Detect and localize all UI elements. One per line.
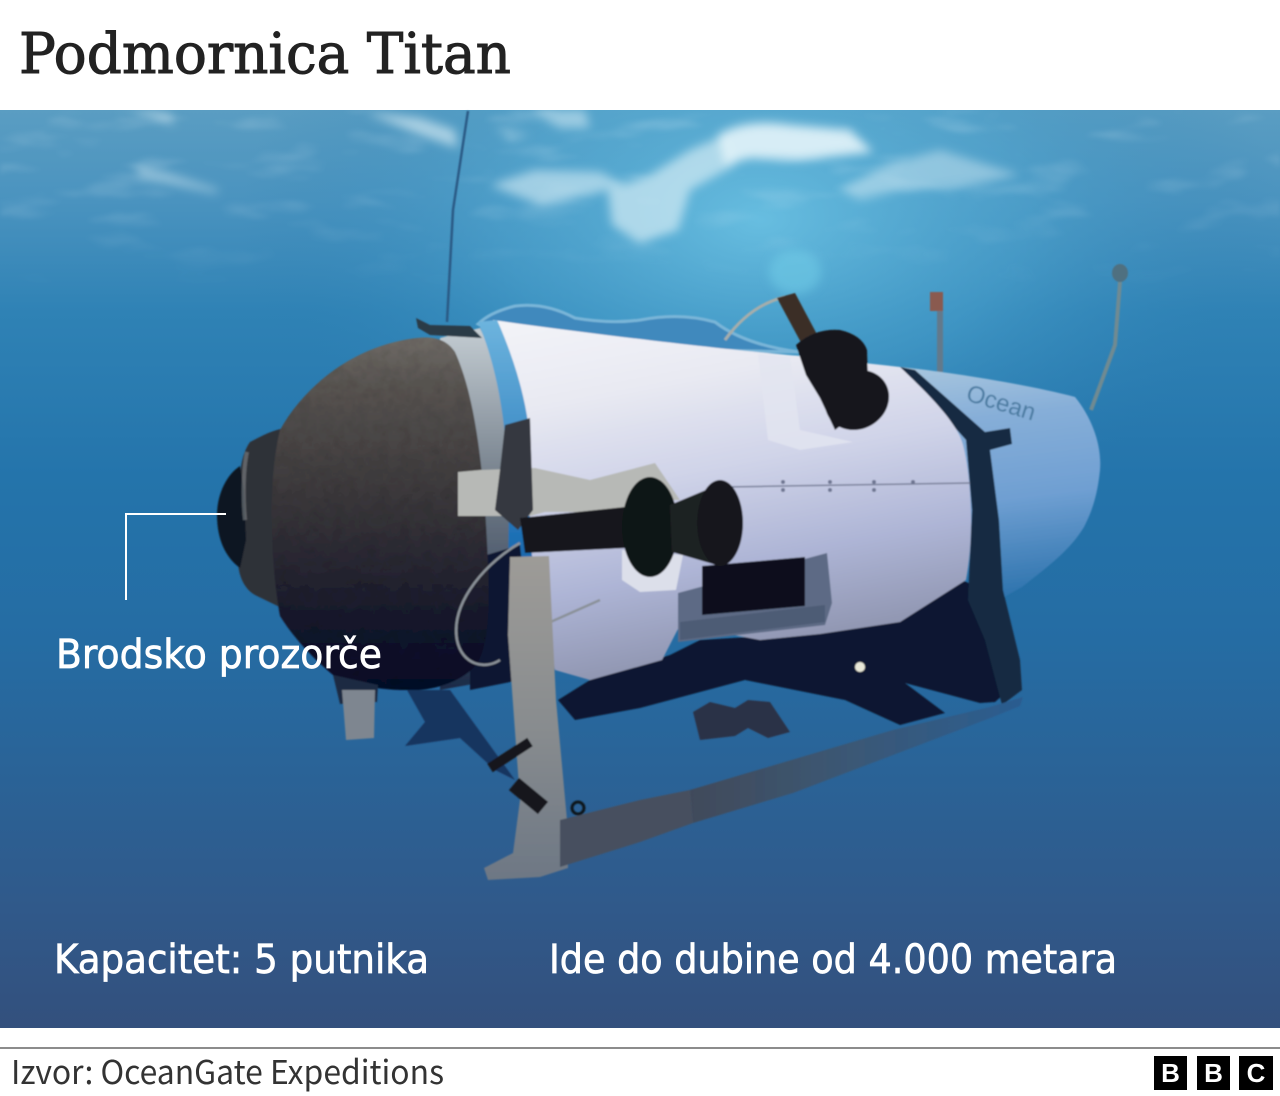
skid ring [572,802,584,814]
OceanGate logo: Ocean [963,380,1039,426]
tail section [900,367,1100,605]
red marker post [930,292,943,372]
submersible Titan [217,111,1128,880]
dome grain [286,370,490,690]
title: Podmornica Titan [19,22,511,87]
mounting plate [333,675,378,740]
nose cone [238,428,290,612]
footer divider [0,1047,1280,1049]
viewport [217,466,246,568]
label: viewport: Brodsko prozorče [56,632,382,678]
dome [272,338,489,690]
window panel [678,553,832,642]
blue ropes [478,305,800,352]
skid sleeve [560,790,693,867]
BBC logo: B [1161,1058,1180,1088]
dark area beneath ring [470,545,530,690]
port light [855,662,865,672]
main thruster [520,477,743,577]
label: capacity: Kapacitet: 5 putnika [54,937,429,983]
BBC logo: B [1204,1058,1223,1088]
antenna [447,111,468,322]
left bracket [405,690,515,780]
cyan blob [769,250,821,294]
blue ring [478,320,548,680]
label: depth: Ide do dubine od 4.000 metara [549,937,1117,983]
frame post [484,556,568,880]
nose highlight [244,452,247,520]
source: Izvor: OceanGate Expeditions [11,1046,444,1094]
white hull [493,320,971,680]
lower dark assembly [558,580,1020,725]
hull seam with rivets [725,480,970,492]
BBC logo [1154,1056,1273,1090]
BBC logo: C [1247,1058,1266,1088]
skid bar [690,697,1023,823]
hull fairing [758,354,853,450]
silver ring [440,328,515,690]
upper thruster [725,293,900,442]
hoses [456,543,600,665]
white plate below thruster [622,550,683,592]
right rear antenna [1091,264,1128,410]
handles [490,742,543,808]
clamp on ring [495,418,533,530]
rear band [900,367,1022,705]
hanging weights [693,700,790,740]
bracket plate [458,463,680,516]
rope knot [416,318,482,338]
callout leader line [126,514,226,600]
